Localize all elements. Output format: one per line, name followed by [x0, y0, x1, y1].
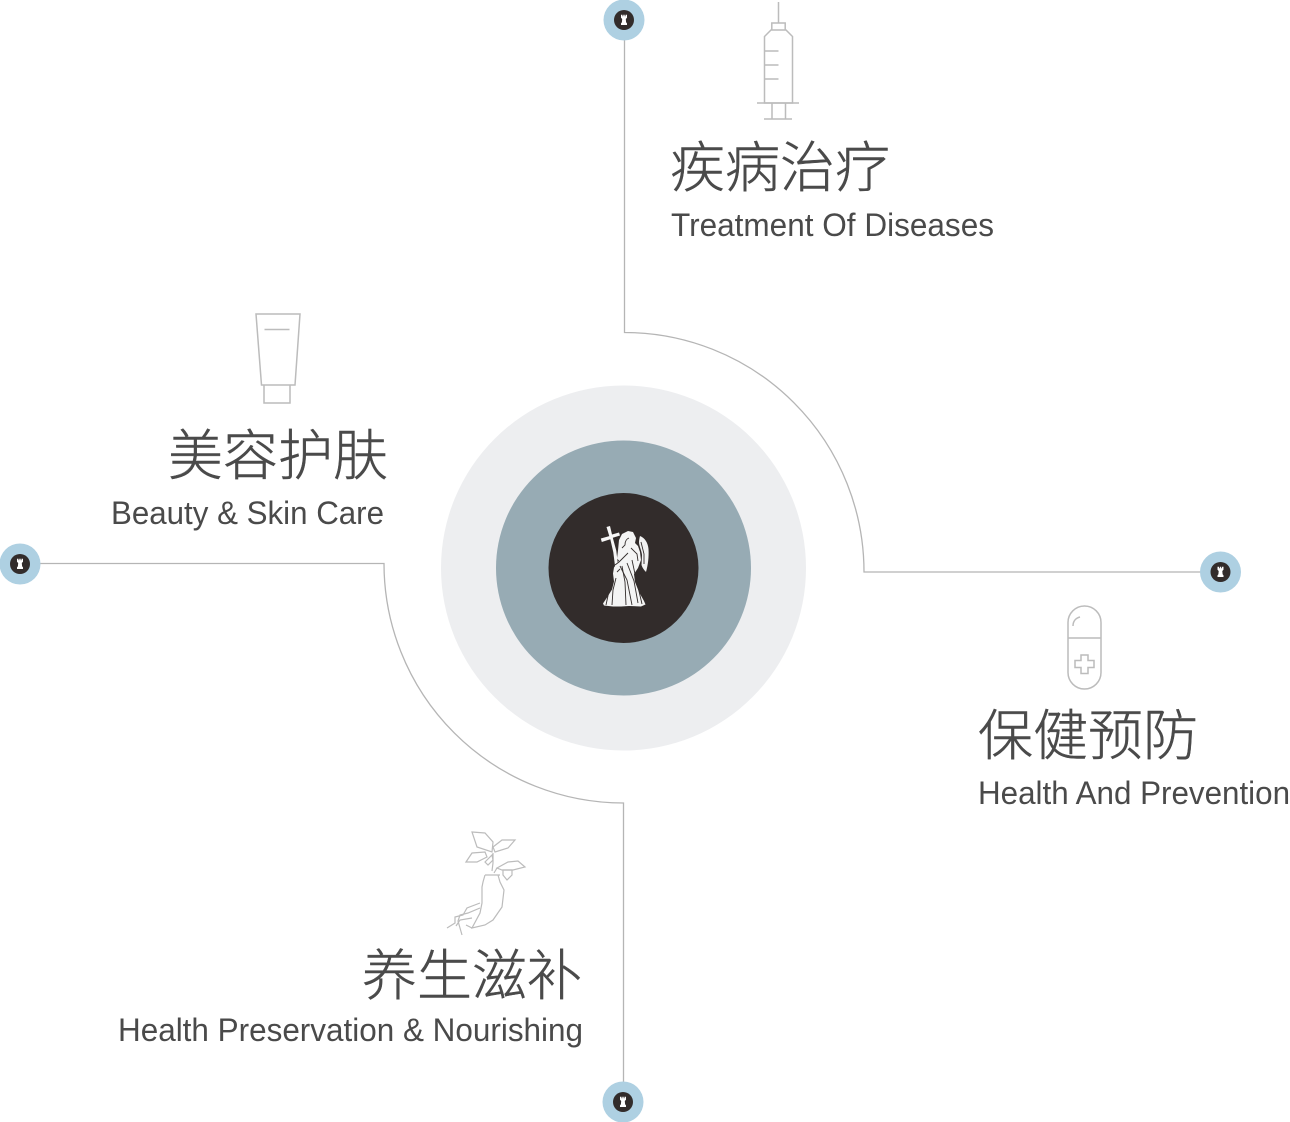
connector line: left to bottom [20, 564, 624, 1102]
icon: syringe [757, 2, 799, 119]
heading: treatment of diseases: Treatment Of Diseases [671, 207, 994, 243]
node: left [0, 544, 40, 584]
robed figure [603, 531, 646, 606]
node: top [604, 0, 644, 40]
heading: beauty and skin care [111, 425, 388, 531]
icon: capsule [1068, 606, 1101, 689]
connector line: top to right [624, 20, 1220, 572]
heading: health and prevention: 保健预防 [978, 705, 1198, 767]
heading: beauty and skin care: Beauty & Skin Care [111, 495, 384, 531]
central concentric circles [441, 386, 806, 750]
icon: skincare tube [256, 314, 300, 403]
wing [639, 536, 649, 572]
heading: health preservation and nourishing [118, 945, 583, 1048]
heading: health and prevention: Health And Prevention [978, 775, 1290, 811]
node: right [1200, 552, 1241, 592]
heading: health preservation and nourishing: Health Preservation & Nourishing [118, 1012, 583, 1048]
node: bottom [602, 1082, 644, 1122]
heading: health preservation and nourishing: 养生滋补 [362, 945, 582, 1007]
heading: beauty and skin care: 美容护肤 [168, 425, 388, 487]
cross [601, 526, 620, 572]
heading: health and prevention [978, 705, 1290, 811]
heading: treatment of diseases [670, 137, 994, 243]
icon: ginseng root [447, 832, 525, 935]
heading: treatment of diseases: 疾病治疗 [670, 137, 890, 199]
icon: angel with cross [601, 526, 649, 606]
